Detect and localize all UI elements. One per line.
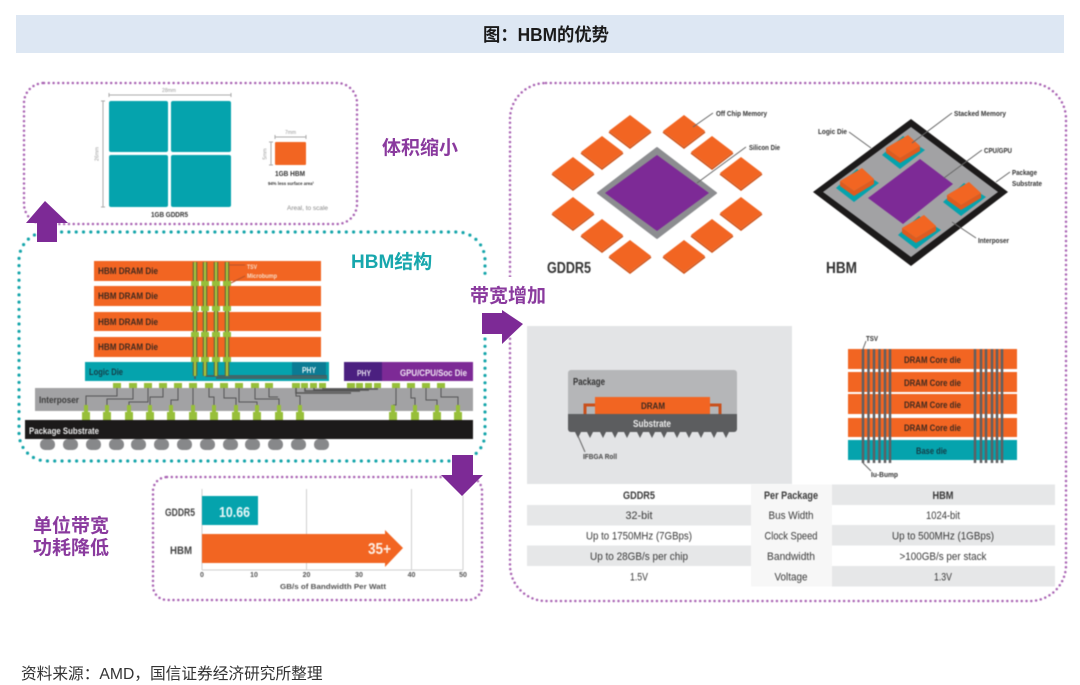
diagram: HBM layout: Package <box>1012 168 1037 177</box>
DRAM die stack: HBM DRAM Die <box>98 317 158 328</box>
TSV and microbump callouts <box>229 264 277 283</box>
diagram: HBM TSV stack: Iu-Bump <box>871 470 898 479</box>
diagram: DRAM package: IFBGA Roll <box>583 452 617 461</box>
DRAM die stack: HBM DRAM Die <box>98 266 158 277</box>
comparison table: Up to 28GB/s per chip <box>590 551 688 563</box>
heading: power per bandwidth <box>33 514 109 559</box>
TSV columns <box>191 262 231 376</box>
dimension marks for HBM: 7mm <box>285 130 296 136</box>
GPU die: PHY <box>357 369 372 378</box>
dimension marks for HBM: 5mm <box>262 148 268 160</box>
axis ticks: 10 <box>250 572 258 579</box>
TSV and microbump callouts: TSV <box>247 264 258 271</box>
axis ticks: 40 <box>408 572 415 579</box>
comparison table: 32-bit <box>626 510 652 522</box>
arrow: up to size panel <box>26 201 68 242</box>
diagram: HBM layout: Substrate <box>1012 179 1042 188</box>
comparison table: HBM <box>932 490 954 502</box>
comparison table: Up to 1750MHz (7GBps) <box>586 530 692 542</box>
heading: power per bandwidth: 功耗降低 <box>33 537 109 559</box>
diagram: DRAM package: Substrate <box>633 419 671 430</box>
diagram: HBM layout: Stacked Memory <box>954 109 1007 118</box>
dimension marks for GDDR5 <box>94 88 231 207</box>
title band <box>16 15 1064 53</box>
comparison table: Clock Speed <box>764 530 818 542</box>
interposer: Interposer <box>39 395 79 406</box>
bar: GDDR5 <box>165 496 258 525</box>
diagram: HBM layout: Logic Die <box>818 127 847 136</box>
diagram: GDDR5 layout <box>547 109 780 277</box>
comparison table: Bandwidth <box>767 551 815 563</box>
dimension marks for HBM <box>262 130 306 165</box>
title band: 图：HBM的优势 <box>483 25 609 45</box>
diagram: HBM layout <box>813 109 1042 277</box>
diagram: GDDR5 layout: GDDR5 <box>547 260 591 277</box>
solder balls <box>40 439 329 450</box>
TSV and microbump callouts: Microbump <box>247 273 277 280</box>
diagram: HBM TSV stack: DRAM Core die <box>904 423 961 434</box>
diagram: DRAM package <box>527 326 792 484</box>
comparison table <box>527 484 1055 586</box>
comparison table: 1.3V <box>934 572 953 584</box>
diagram: HBM TSV stack <box>848 334 1017 479</box>
diagram: HBM layout: HBM <box>826 260 857 277</box>
package bumps <box>82 405 462 420</box>
microbumps <box>113 383 445 388</box>
panel: HBM structure <box>19 232 485 461</box>
bar: HBM: HBM <box>170 545 192 557</box>
diagram: DRAM package: Package <box>573 377 605 388</box>
axis ticks: 0 <box>200 572 204 579</box>
arrow: down to power panel <box>441 455 483 496</box>
axis title: GB/s of Bandwidth Per Watt <box>280 582 387 591</box>
GPU die <box>344 362 473 381</box>
DRAM die stack: HBM DRAM Die <box>98 291 158 302</box>
panel: bandwidth per watt <box>153 477 482 600</box>
interposer <box>35 376 473 411</box>
comparison table: 1024-bit <box>926 510 960 522</box>
label: areal to scale: Areal, to scale <box>287 205 328 212</box>
bar: HBM <box>170 530 403 567</box>
comparison table: >100GB/s per stack <box>900 551 987 563</box>
package substrate <box>25 420 473 439</box>
bar: HBM: 35+ <box>368 541 391 558</box>
diagram: HBM layout: CPU/GPU <box>984 146 1012 155</box>
diagram: HBM TSV stack: TSV <box>866 334 878 343</box>
logic die: PHY <box>302 366 317 375</box>
dimension marks for GDDR5: 28mm <box>162 88 176 94</box>
diagram: HBM TSV stack: DRAM Core die <box>904 378 961 389</box>
comparison table: GDDR5 <box>623 490 655 502</box>
diagram: HBM layout: Interposer <box>978 236 1009 245</box>
label: 1GB HBM: 1GB HBM <box>275 169 305 178</box>
diagram: HBM TSV stack: DRAM Core die <box>904 400 961 411</box>
bar: GDDR5: 10.66 <box>219 504 250 521</box>
label: 1GB GDDR5: 1GB GDDR5 <box>151 210 188 219</box>
GPU die: GPU/CPU/Soc Die <box>400 368 467 379</box>
bar: GDDR5: GDDR5 <box>165 507 195 519</box>
comparison table: Up to 500MHz (1GBps) <box>892 530 994 542</box>
diagram: HBM TSV stack: Base die <box>916 446 947 457</box>
panel: bandwidth comparison <box>510 83 1066 601</box>
comparison table: Per Package <box>764 490 818 502</box>
comparison table: 1.5V <box>630 572 649 584</box>
axis ticks: 20 <box>303 572 310 579</box>
diagram: GDDR5 layout: Off Chip Memory <box>716 109 768 118</box>
diagram: DRAM package: DRAM <box>641 401 665 412</box>
axis ticks: 50 <box>459 572 467 579</box>
arrow: right to bandwidth panel <box>482 310 523 344</box>
logic die: Logic Die <box>89 367 123 378</box>
icon: HBM chip <box>275 142 306 165</box>
bar chart: gridlines <box>202 489 463 570</box>
axis ticks <box>200 572 467 579</box>
DRAM die stack <box>94 261 321 357</box>
label: less surface area: 94% less surface area¹ <box>268 181 314 186</box>
package substrate: Package Substrate <box>29 426 99 437</box>
comparison table: Bus Width <box>768 510 814 522</box>
axis ticks: 30 <box>355 572 363 579</box>
heading: size reduction: 体积缩小 <box>382 136 458 159</box>
stacked memory modules <box>882 135 925 169</box>
dimension marks for GDDR5: 26mm <box>94 147 100 161</box>
comparison table: Voltage <box>774 572 808 584</box>
DRAM die stack: HBM DRAM Die <box>98 342 158 353</box>
logic die <box>85 362 329 381</box>
diagram: HBM TSV stack: DRAM Core die <box>904 355 961 366</box>
source note: 资料来源：AMD，国信证券经济研究所整理 <box>21 665 323 683</box>
icon: four GDDR5 chips <box>109 101 231 207</box>
heading: power per bandwidth: 单位带宽 <box>33 514 109 537</box>
diagram: GDDR5 layout: Silicon Die <box>749 143 780 152</box>
heading: HBM structure: HBM结构 <box>351 251 432 273</box>
heading: bandwidth increase: 带宽增加 <box>470 284 546 307</box>
panel: size reduction <box>24 83 357 224</box>
